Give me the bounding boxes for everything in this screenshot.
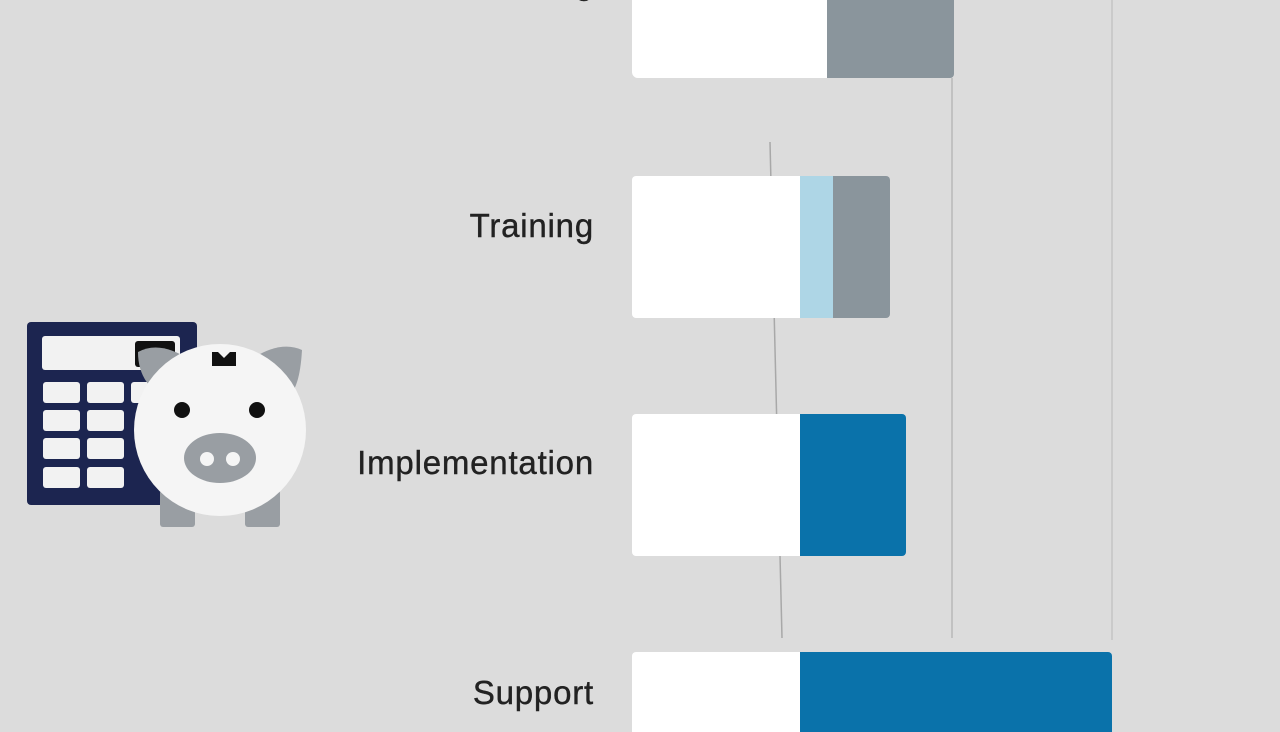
icon: calculator and piggy bank [27,322,306,527]
label: support: Support [473,674,594,711]
label: implementation: Implementation [357,444,594,481]
bar: support [632,652,1112,732]
bar: licensing [632,0,954,78]
label: training: Training [470,207,594,244]
bar: implementation [632,414,906,556]
bar: training [632,176,890,318]
